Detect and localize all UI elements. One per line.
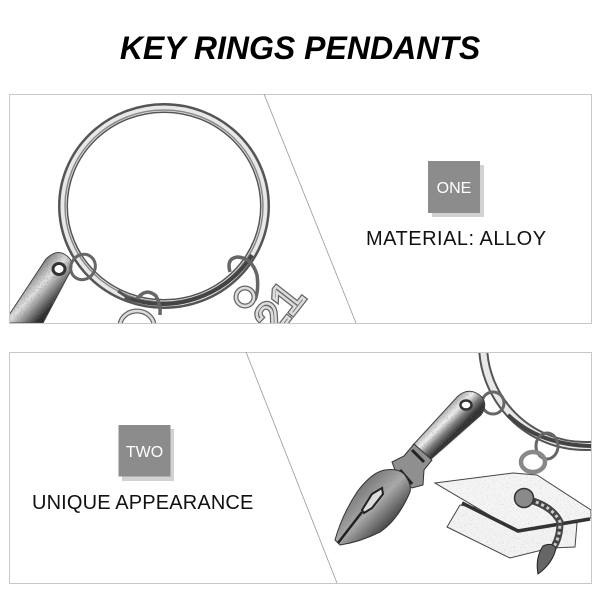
badge: one xyxy=(428,161,484,217)
badge: two xyxy=(118,425,174,481)
badge: one: ONE xyxy=(437,180,471,197)
photo: key ring with charms: 21 xyxy=(245,274,314,342)
photo: pen nib and graduation cap charms xyxy=(334,353,591,575)
text: appearance: UNIQUE APPEARANCE xyxy=(32,492,254,514)
panel: material xyxy=(9,94,592,342)
text: material: MATERIAL: ALLOY xyxy=(366,228,547,250)
badge: two: TWO xyxy=(126,444,163,461)
photo: key ring with charms: 21 xyxy=(245,274,314,342)
photo: key ring with charms xyxy=(9,108,314,342)
panel: appearance xyxy=(9,352,592,584)
title: KEY RINGS PENDANTS xyxy=(120,30,481,66)
